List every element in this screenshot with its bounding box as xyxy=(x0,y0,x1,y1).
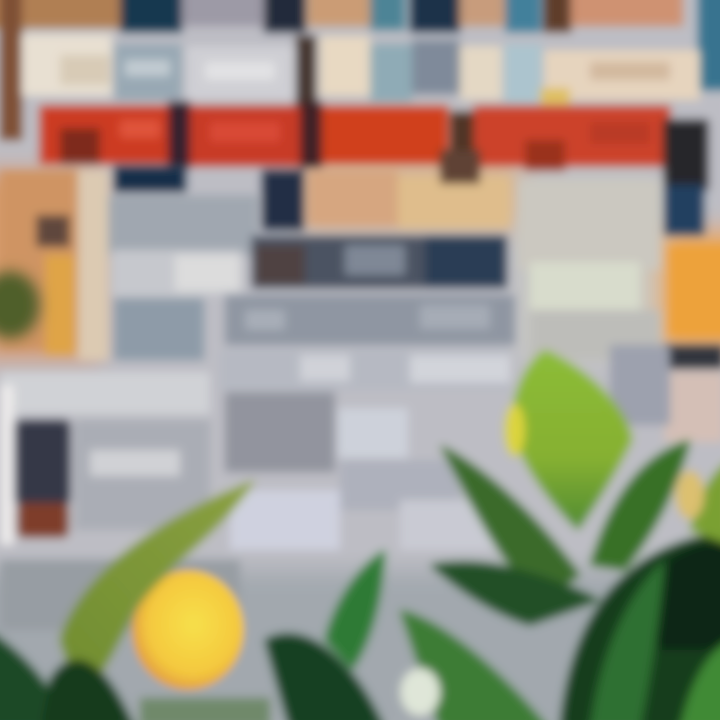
yellow glowing light xyxy=(132,570,244,690)
dark door panel xyxy=(16,420,70,537)
dark awning xyxy=(252,236,507,288)
mid facade blocks xyxy=(0,120,720,442)
small left plant xyxy=(0,271,40,339)
dark green right plant xyxy=(430,440,720,720)
red banner xyxy=(40,102,670,172)
blurred left foreground leaves xyxy=(0,480,255,720)
lower shop front xyxy=(0,295,670,630)
top row of upper facade xyxy=(0,0,720,140)
bright central plant leaf xyxy=(505,350,632,530)
blurred centre foreground leaves xyxy=(140,550,550,720)
pale signage band xyxy=(22,34,700,146)
